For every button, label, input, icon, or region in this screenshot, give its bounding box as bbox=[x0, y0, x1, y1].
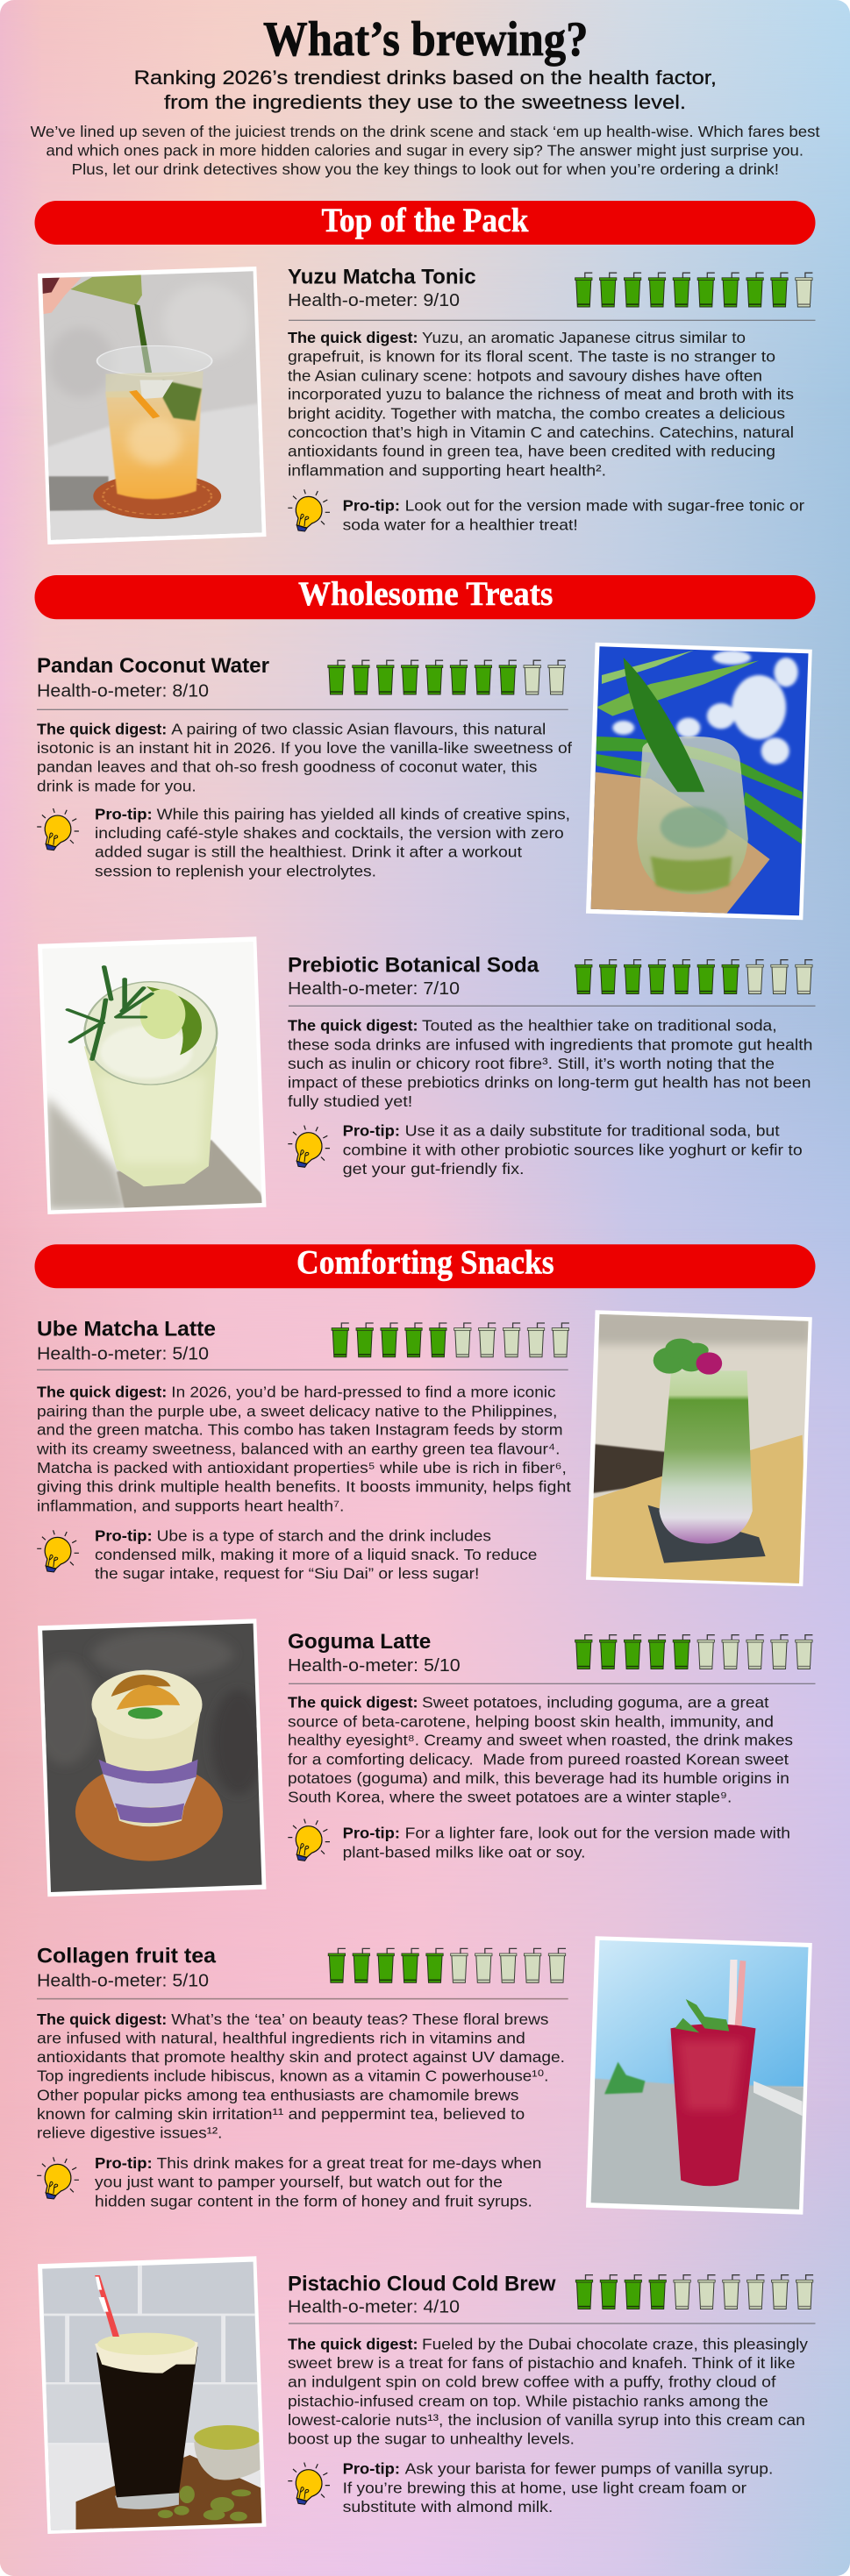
quick digest: The quick digest: bbox=[288, 1017, 418, 1035]
panel: Goguma Latte bbox=[32, 1616, 815, 1903]
pro-tip bbox=[95, 1526, 537, 1583]
pro-tip: This drink makes for a great treat for me-days when bbox=[157, 2154, 541, 2172]
quick digest bbox=[288, 1017, 812, 1110]
quick digest: isotonic is an instant hit in 2026. If you love the vanilla-like sweetness of bbox=[37, 739, 572, 757]
health score: Health-o-meter: 5/10 bbox=[37, 1345, 209, 1364]
intro paragraph: Plus, let our drink detectives show you the key things to look out for when you’re ordering a drink! bbox=[72, 160, 779, 178]
pro-tip: plant-based milks like oat or soy. bbox=[343, 1843, 586, 1861]
quick digest bbox=[288, 329, 794, 479]
pro-tip: Ube is a type of starch and the drink includes bbox=[157, 1526, 491, 1544]
icon: light bulb bbox=[37, 2157, 79, 2199]
pro-tip: condensed milk, making it more of a liquid snack. To reduce bbox=[95, 1546, 537, 1563]
photo: pistachio cloud cold brew bbox=[32, 2256, 276, 2537]
health score: Health-o-meter: 5/10 bbox=[37, 1972, 209, 1991]
quick digest: incorporated yuzu to balance the richness of meat and broth with its bbox=[288, 386, 794, 403]
quick digest: A pairing of two classic Asian flavours, this natural bbox=[171, 720, 546, 737]
panel: Prebiotic Botanical Soda bbox=[32, 936, 815, 1221]
drink name: Pandan Coconut Water bbox=[37, 654, 269, 678]
quick digest: Matcha is packed with antioxidant properties⁵ while ube is rich in fiber⁶, bbox=[37, 1459, 567, 1477]
photo: collagen fruit tea bbox=[585, 1935, 813, 2218]
health meter: 9 of 10 cups bbox=[575, 273, 812, 307]
panel: Pandan Coconut Water bbox=[37, 643, 813, 921]
pro-tip: Ask your barista for fewer pumps of vanilla syrup. bbox=[405, 2460, 773, 2478]
quick digest: potatoes (goguma) and milk, this beverage had its humble origins in bbox=[288, 1769, 789, 1787]
title: What’s brewing? bbox=[263, 12, 588, 67]
icon: light bulb bbox=[288, 1126, 330, 1167]
icon: light bulb bbox=[288, 1819, 330, 1861]
pro-tip: While this pairing has yielded all kinds of creative spins, bbox=[157, 805, 570, 822]
pro-tip: Pro-tip: bbox=[343, 2460, 400, 2478]
quick digest: source of beta-carotene, helping boost skin health, immunity, and bbox=[288, 1712, 774, 1730]
icon: light bulb bbox=[288, 489, 330, 531]
quick digest bbox=[36, 1384, 571, 1514]
drink name: Prebiotic Botanical Soda bbox=[288, 953, 539, 977]
icon: light bulb bbox=[288, 2463, 330, 2504]
quick digest: these soda drinks are infused with ingredients that promote gut health bbox=[288, 1035, 812, 1053]
quick digest: are infused with natural, healthful ingredients rich in vitamins and bbox=[37, 2029, 525, 2046]
quick digest: healthy eyesight⁸. Creamy and sweet when roasted, the drink makes bbox=[288, 1732, 793, 1749]
quick digest: inflammation, and supports heart health⁷. bbox=[37, 1497, 344, 1514]
quick digest: relieve digestive issues¹². bbox=[37, 2124, 222, 2142]
quick digest bbox=[288, 2335, 808, 2448]
subtitle: Ranking 2026’s trendiest drinks based on the health factor, bbox=[134, 67, 717, 89]
panel: Collagen fruit tea bbox=[37, 1935, 813, 2218]
quick digest: the Asian culinary scene: hotpots and savoury dishes have often bbox=[288, 366, 762, 384]
icon: light bulb bbox=[37, 1530, 79, 1572]
health score: Health-o-meter: 5/10 bbox=[288, 1656, 461, 1676]
icon: light bulb bbox=[37, 808, 79, 850]
quick digest: known for calming skin irritation¹¹ and peppermint tea, believed to bbox=[37, 2105, 525, 2123]
quick digest: The quick digest: bbox=[37, 1384, 167, 1401]
quick digest: Other popular picks among tea enthusiasts are chamomile brews bbox=[37, 2086, 519, 2103]
quick digest bbox=[37, 720, 572, 794]
health meter: 7 of 10 cups bbox=[575, 960, 812, 994]
quick digest: lowest-calorie nuts¹³, the inclusion of vanilla syrup into this cream can bbox=[288, 2411, 805, 2429]
quick digest: sweet brew is a treat for fans of pistachio and knafeh. Think of it like bbox=[288, 2354, 796, 2372]
quick digest: Top ingredients include hibiscus, known as a vitamin C powerhouse¹⁰. bbox=[37, 2067, 548, 2085]
photo: pandan coconut water bbox=[585, 643, 813, 921]
subtitle: from the ingredients they use to the sweetness level. bbox=[164, 91, 686, 113]
drink name: Collagen fruit tea bbox=[37, 1944, 217, 1968]
pro-tip: Pro-tip: bbox=[343, 1122, 400, 1140]
quick digest: an indulgent spin on cold brew coffee with a puffy, frothy cloud of bbox=[288, 2373, 776, 2391]
quick digest: Sweet potatoes, including goguma, are a great bbox=[422, 1694, 769, 1711]
section header: Wholesome Treats: Wholesome Treats bbox=[298, 575, 553, 613]
pro-tip: you just want to pamper yourself, but watch out for the bbox=[95, 2174, 503, 2191]
health meter: 5 of 10 cups bbox=[575, 1635, 812, 1669]
pro-tip bbox=[343, 1825, 790, 1861]
subtitle bbox=[134, 67, 717, 113]
quick digest: Fueled by the Dubai chocolate craze, this pleasingly bbox=[422, 2335, 808, 2352]
quick digest bbox=[288, 1694, 793, 1806]
intro paragraph bbox=[31, 123, 820, 178]
pro-tip: soda water for a healthier treat! bbox=[343, 516, 578, 533]
quick digest: drink is made for you. bbox=[37, 777, 196, 794]
quick digest: inflammation and supporting heart health². bbox=[288, 461, 606, 479]
quick digest: The quick digest: bbox=[288, 1694, 418, 1711]
health score: Health-o-meter: 9/10 bbox=[288, 291, 460, 310]
drink name: Yuzu Matcha Tonic bbox=[288, 265, 476, 288]
panel: Yuzu Matcha Tonic bbox=[32, 263, 815, 550]
pro-tip: session to replenish your electrolytes. bbox=[95, 862, 376, 879]
section header: Top of the Pack bbox=[35, 201, 816, 245]
quick digest: pistachio-infused cream on top. While pistachio ranks among the bbox=[288, 2392, 768, 2409]
pro-tip: Pro-tip: bbox=[95, 805, 153, 822]
quick digest: What’s the ‘tea’ on beauty teas? These floral brews bbox=[171, 2010, 549, 2028]
quick digest: In 2026, you’d be hard-pressed to find a more iconic bbox=[171, 1384, 556, 1401]
quick digest: impact of these prebiotics drinks on long-term gut health has not been bbox=[288, 1074, 811, 1092]
pro-tip: Use it as a daily substitute for traditional soda, but bbox=[405, 1122, 780, 1140]
drink name: Ube Matcha Latte bbox=[37, 1317, 216, 1341]
pro-tip: the sugar intake, request for “Siu Dai” or less sugar! bbox=[95, 1565, 479, 1583]
quick digest: The quick digest: bbox=[288, 329, 418, 346]
health meter: 4 of 10 cups bbox=[575, 2275, 813, 2309]
pro-tip bbox=[343, 1122, 803, 1178]
health score: Health-o-meter: 4/10 bbox=[288, 2298, 460, 2317]
intro paragraph: We’ve lined up seven of the juiciest trends on the drink scene and stack ‘em up health-wise. Which fares best bbox=[31, 123, 820, 140]
quick digest: grapefruit, is known for its floral scent. The taste is no stranger to bbox=[288, 348, 775, 366]
photo: yuzu matcha tonic bbox=[32, 263, 276, 550]
panel: Ube Matcha Latte bbox=[36, 1309, 813, 1590]
quick digest: fully studied yet! bbox=[288, 1092, 412, 1110]
section header: Top of the Pack: Top of the Pack bbox=[321, 202, 529, 239]
quick digest: concoction that’s high in Vitamin C and catechins. Catechins, natural bbox=[288, 423, 794, 441]
pro-tip: get your gut-friendly fix. bbox=[343, 1160, 525, 1178]
quick digest: with its creamy sweetness, balanced with an earthy green tea flavour⁴. bbox=[36, 1440, 560, 1457]
pro-tip: If you’re brewing this at home, use light cream foam or bbox=[343, 2479, 746, 2496]
pro-tip: combine it with other probiotic sources like yoghurt or kefir to bbox=[343, 1141, 803, 1158]
quick digest: The quick digest: bbox=[288, 2335, 418, 2352]
intro paragraph: and which ones pack in more hidden calories and sugar in every sip? The answer might just surprise you. bbox=[46, 142, 804, 160]
quick digest: antioxidants found in green tea, have been credited with reducing bbox=[288, 443, 775, 460]
pro-tip: Look out for the version made with sugar-free tonic or bbox=[405, 497, 804, 515]
section header: Comforting Snacks bbox=[35, 1244, 816, 1288]
pro-tip: Pro-tip: bbox=[95, 2154, 153, 2172]
quick digest: giving this drink multiple health benefits. It boosts immunity, helps fight bbox=[37, 1478, 571, 1496]
quick digest: for a comforting delicacy. Made from pureed roasted Korean sweet bbox=[288, 1750, 789, 1768]
section header: Wholesome Treats bbox=[35, 575, 816, 619]
pro-tip: Pro-tip: bbox=[343, 1825, 400, 1842]
quick digest: boost up the sugar to unhealthy levels. bbox=[288, 2430, 575, 2448]
health meter: 5 of 10 cups bbox=[332, 1323, 569, 1357]
quick digest: antioxidants that promote healthy skin and protect against UV damage. bbox=[37, 2048, 565, 2066]
pro-tip bbox=[343, 497, 804, 533]
quick digest bbox=[37, 2010, 565, 2142]
pro-tip bbox=[95, 805, 570, 879]
quick digest: pandan leaves and that oh-so fresh goodness of coconut water, this bbox=[37, 758, 538, 776]
quick digest: Touted as the healthier take on traditional soda, bbox=[422, 1017, 777, 1035]
section header: Comforting Snacks: Comforting Snacks bbox=[296, 1244, 554, 1282]
quick digest: The quick digest: bbox=[37, 2010, 167, 2028]
drink name: Pistachio Cloud Cold Brew bbox=[288, 2272, 556, 2295]
health meter: 8 of 10 cups bbox=[328, 660, 566, 694]
pro-tip: Pro-tip: bbox=[343, 497, 400, 515]
pro-tip: Pro-tip: bbox=[95, 1526, 153, 1544]
photo: goguma latte bbox=[32, 1616, 276, 1903]
pro-tip: added sugar is still the healthiest. Drink it after a workout bbox=[95, 843, 522, 861]
quick digest: bright acidity. Together with matcha, the combo creates a delicious bbox=[288, 404, 785, 422]
drink name: Goguma Latte bbox=[288, 1630, 431, 1654]
quick digest: such as inulin or chicory root fibre³. Still, it’s worth noting that the bbox=[288, 1055, 775, 1072]
health score: Health-o-meter: 7/10 bbox=[288, 979, 460, 999]
pro-tip: For a lighter fare, look out for the version made with bbox=[405, 1825, 790, 1842]
quick digest: The quick digest: bbox=[37, 720, 167, 737]
photo: ube matcha latte bbox=[585, 1309, 813, 1590]
pro-tip: substitute with almond milk. bbox=[343, 2498, 553, 2516]
quick digest: South Korea, where the sweet potatoes are a winter staple⁹. bbox=[288, 1789, 732, 1806]
pro-tip: including café-style shakes and cocktails, the version with zero bbox=[95, 824, 564, 842]
quick digest: Yuzu, an aromatic Japanese citrus similar to bbox=[422, 329, 746, 346]
pro-tip bbox=[343, 2460, 773, 2516]
quick digest: and the green matcha. This combo has taken Instagram feeds by storm bbox=[37, 1421, 563, 1439]
panel: Pistachio Cloud Cold Brew bbox=[32, 2256, 815, 2537]
health score: Health-o-meter: 8/10 bbox=[37, 681, 209, 701]
health meter: 5 of 10 cups bbox=[328, 1948, 566, 1982]
pro-tip: hidden sugar content in the form of honey and fruit syrups. bbox=[95, 2192, 532, 2210]
quick digest: pairing than the purple ube, a sweet delicacy native to the Philippines, bbox=[37, 1402, 557, 1420]
photo: prebiotic botanical soda bbox=[32, 936, 276, 1221]
pro-tip bbox=[95, 2154, 541, 2210]
